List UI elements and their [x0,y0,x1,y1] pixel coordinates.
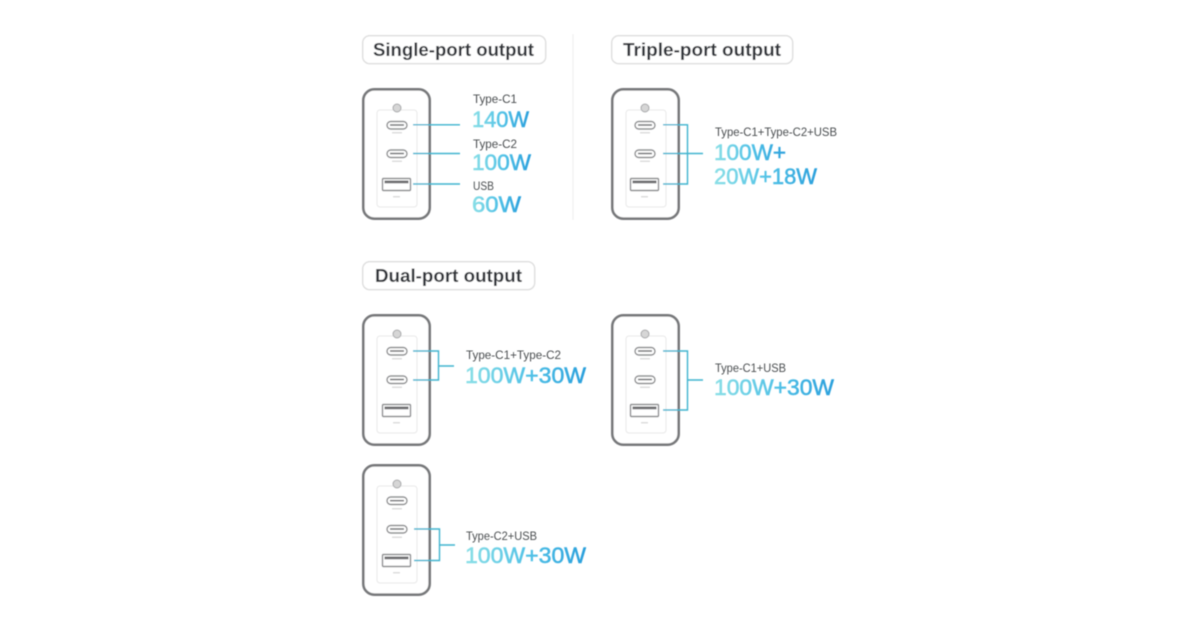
label: 100W+ 20W+18W [714,140,818,189]
panel: triple-port charger diagram [612,89,837,219]
label: Type-C2 100W [472,139,532,175]
label: 100W+30W: 100W+30W [714,375,835,400]
icon: charger with three ports [363,89,430,219]
label: Type-C1 140W: 140W [472,107,530,132]
panel: single-port charger diagram [363,89,532,219]
label: Type-C2 100W: 100W [472,150,532,175]
label: Type-C1+Type-C2+USB: Type-C1+Type-C2+USB [715,127,837,139]
label: Type-C1 140W: Type-C1 [473,94,517,106]
label: Type-C1+Type-C2: Type-C1+Type-C2 [466,350,561,362]
heading: Triple-port output: Triple-port output [623,40,781,60]
heading: Single-port output: Single-port output [373,40,534,60]
panel: dual-port Type-C2+USB [363,465,587,595]
heading: Single-port output [363,36,546,64]
label: Type-C2 100W: Type-C2 [473,139,517,151]
heading: Triple-port output [612,36,793,64]
heading: Dual-port output: Dual-port output [375,266,522,286]
label: Type-C2+USB: Type-C2+USB [466,531,537,543]
label: 100W+ 20W+18W: 100W+ [714,140,786,165]
heading: Dual-port output [363,262,535,290]
connector lines [663,125,703,184]
panel: dual-port Type-C1+Type-C2 [363,315,587,445]
label: 100W+30W: 100W+30W [465,543,587,568]
label: USB 60W [472,181,522,217]
label: 100W+ 20W+18W: 20W+18W [714,164,818,189]
label: Type-C1 140W [472,94,530,132]
label: 100W+30W: 100W+30W [465,363,587,388]
icon: charger with three ports [612,315,679,445]
connector lines [663,351,703,410]
connector lines [413,351,454,380]
label: USB 60W: 60W [472,192,522,217]
connector lines [413,125,460,184]
connector lines [414,529,455,560]
icon: charger with three ports [612,89,679,219]
panel: dual-port Type-C1+USB [612,315,835,445]
label: USB 60W: USB [473,181,494,193]
icon: charger with three ports [363,315,430,445]
label: Type-C1+USB: Type-C1+USB [715,363,786,375]
icon: charger with three ports [363,465,430,595]
